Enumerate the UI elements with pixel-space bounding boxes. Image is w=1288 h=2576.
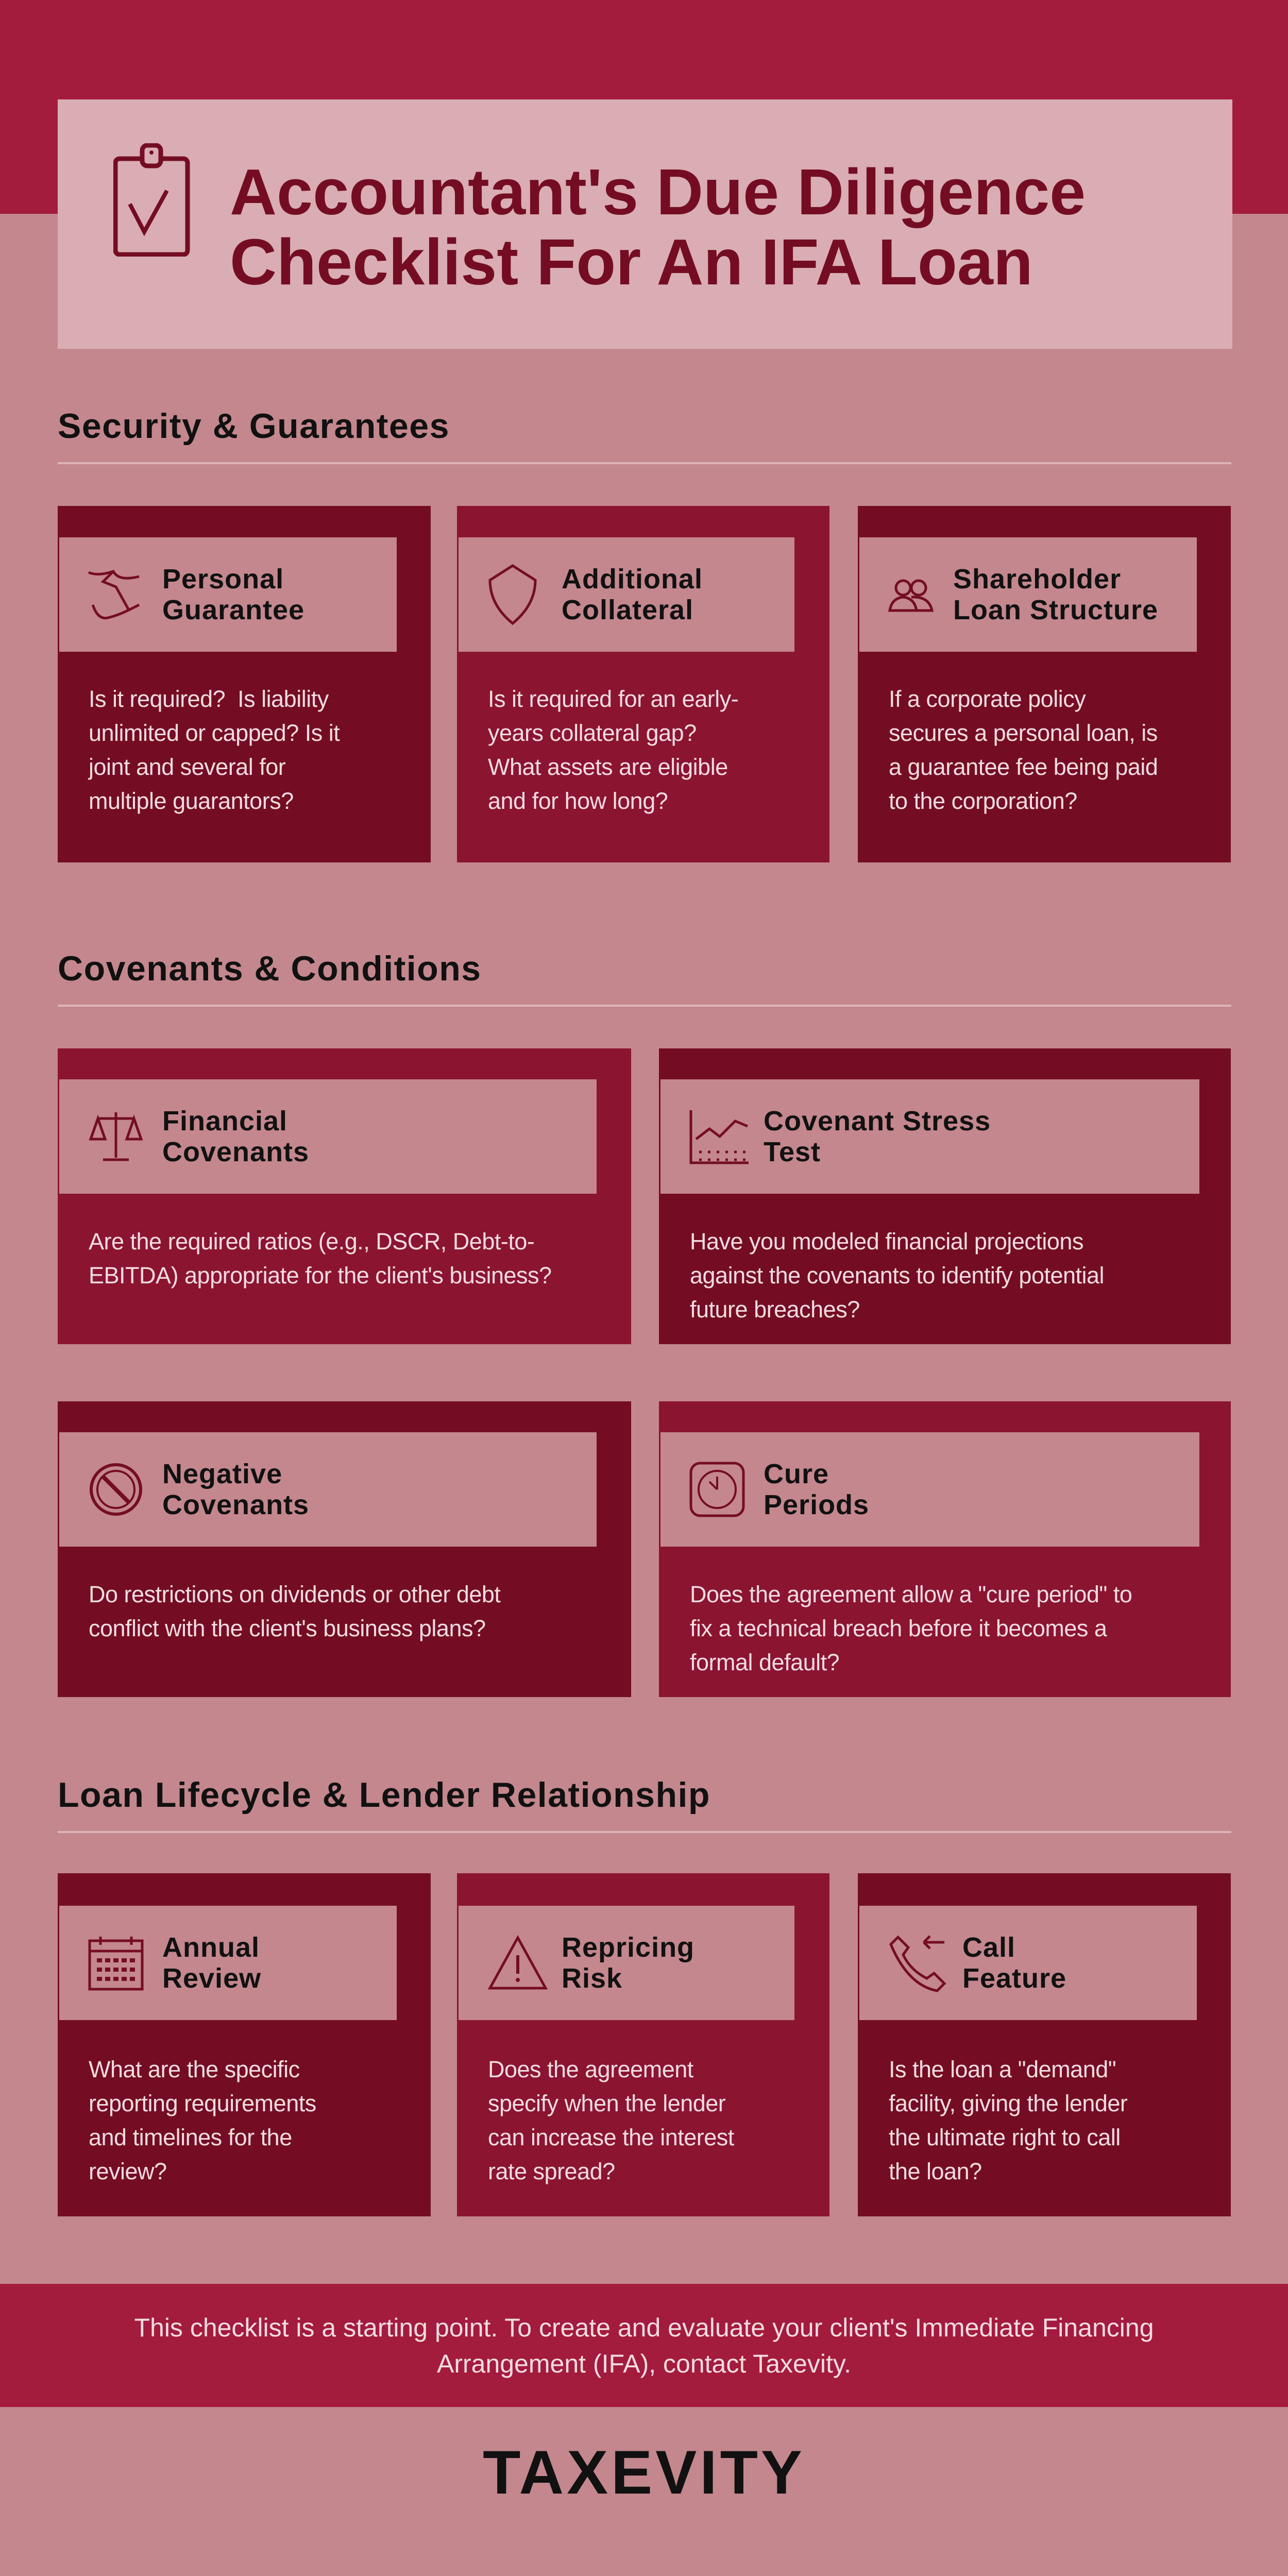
text — [89, 2056, 316, 2184]
label box: Covenants — [162, 1489, 309, 1520]
text: future breaches? — [690, 1296, 860, 1323]
label box: Annual — [162, 1932, 260, 1963]
text: Is the loan a "demand" — [889, 2056, 1116, 2082]
text: review? — [89, 2158, 167, 2184]
label box — [660, 1432, 1199, 1547]
text: can increase the interest — [488, 2124, 734, 2150]
label box — [59, 1906, 397, 2020]
text: Have you modeled financial projections — [690, 1228, 1083, 1255]
text — [690, 1228, 1104, 1323]
label box: Risk — [562, 1963, 622, 1994]
text — [889, 686, 1158, 814]
card: Shareholder Loan Structure — [858, 506, 1231, 862]
label box: Call — [962, 1932, 1015, 1963]
text: EBITDA) appropriate for the client's business? — [89, 1262, 552, 1289]
label box — [859, 1906, 1197, 2020]
text: reporting requirements — [89, 2090, 316, 2116]
card: Call Feature — [858, 1873, 1231, 2216]
title: Checklist For An IFA Loan — [230, 226, 1033, 298]
label box: Covenant Stress — [764, 1106, 991, 1137]
label box: Repricing — [562, 1932, 694, 1963]
text — [88, 686, 340, 814]
text: a guarantee fee being paid — [889, 754, 1158, 780]
text: and timelines for the — [89, 2124, 292, 2150]
text: Do restrictions on dividends or other debt — [89, 1581, 500, 1607]
card: Covenant Stress Test — [659, 1048, 1231, 1344]
label box: Guarantee — [162, 595, 304, 625]
icon: clipboard — [113, 143, 190, 257]
card: Financial Covenants — [58, 1048, 631, 1344]
text: What assets are eligible — [488, 754, 728, 780]
text: rate spread? — [488, 2158, 615, 2184]
card: Cure Periods — [659, 1401, 1231, 1697]
text: the ultimate right to call — [889, 2124, 1121, 2150]
title box — [58, 99, 1232, 349]
text: joint and several for — [89, 754, 285, 780]
label box: Periods — [764, 1489, 869, 1520]
text: against the covenants to identify potential — [690, 1262, 1104, 1289]
card: Negative Covenants — [58, 1401, 631, 1697]
label box — [459, 1906, 794, 2020]
text — [488, 686, 738, 814]
label box — [660, 1079, 1199, 1194]
label box — [59, 537, 397, 652]
text — [89, 1228, 552, 1289]
label box: Feature — [962, 1963, 1066, 1994]
label box — [459, 537, 794, 652]
label box: Financial — [162, 1106, 287, 1137]
logo: TAXEVITY — [483, 2438, 805, 2507]
heading: Loan Lifecycle & Lender Relationship: Loan Lifecycle & Lender Relationship — [58, 1775, 710, 1815]
label box: Negative — [162, 1459, 282, 1489]
text — [488, 2056, 734, 2184]
card: Repricing Risk — [457, 1873, 829, 2216]
text: Does the agreement — [488, 2056, 693, 2082]
label box: Personal — [162, 564, 284, 595]
label box — [59, 1432, 597, 1547]
text: What are the specific — [89, 2056, 300, 2082]
label box: Additional — [562, 564, 703, 595]
label box: Shareholder — [953, 564, 1121, 595]
text: Does the agreement allow a "cure period" to — [690, 1581, 1132, 1607]
label box — [859, 537, 1197, 652]
card: Personal Guarantee — [58, 506, 431, 862]
text: to the corporation? — [889, 788, 1077, 814]
text: Are the required ratios (e.g., DSCR, Debt-to- — [89, 1228, 534, 1255]
heading: Covenants & Conditions: Covenants & Conditions — [58, 949, 482, 988]
text: years collateral gap? — [488, 720, 697, 746]
label box: Collateral — [562, 595, 693, 625]
text: specify when the lender — [488, 2090, 725, 2116]
title — [230, 156, 1086, 298]
text: secures a personal loan, is — [889, 720, 1158, 746]
text — [889, 2056, 1127, 2184]
text: conflict with the client's business plans? — [89, 1615, 485, 1641]
card: Annual Review — [58, 1873, 431, 2216]
text: unlimited or capped? Is it — [89, 720, 340, 746]
text: multiple guarantors? — [89, 788, 294, 814]
footer band — [0, 2284, 1288, 2407]
text: facility, giving the lender — [889, 2090, 1127, 2116]
text — [690, 1581, 1132, 1675]
label box — [59, 1079, 597, 1194]
text: formal default? — [690, 1649, 839, 1675]
top band — [0, 0, 1288, 214]
title: Accountant's Due Diligence — [230, 156, 1086, 228]
label box: Loan Structure — [953, 595, 1158, 625]
text: Is it required? Is liability — [89, 686, 329, 712]
label box: Cure — [764, 1459, 829, 1489]
label box: Review — [162, 1963, 261, 1994]
heading: Security & Guarantees: Security & Guarantees — [58, 406, 450, 446]
text: and for how long? — [488, 788, 668, 814]
text: If a corporate policy — [889, 686, 1086, 712]
footer text: This checklist is a starting point. To create and evaluate your client's Immediate Financing Arrangement (IFA), contact Taxevity. — [134, 2313, 1154, 2378]
card: Additional Collateral — [457, 506, 829, 862]
text — [89, 1581, 501, 1641]
text: Is it required for an early- — [488, 686, 738, 712]
text: fix a technical breach before it becomes a — [690, 1615, 1107, 1641]
label box: Test — [764, 1137, 821, 1167]
label box: Covenants — [162, 1137, 309, 1167]
text: the loan? — [889, 2158, 982, 2184]
